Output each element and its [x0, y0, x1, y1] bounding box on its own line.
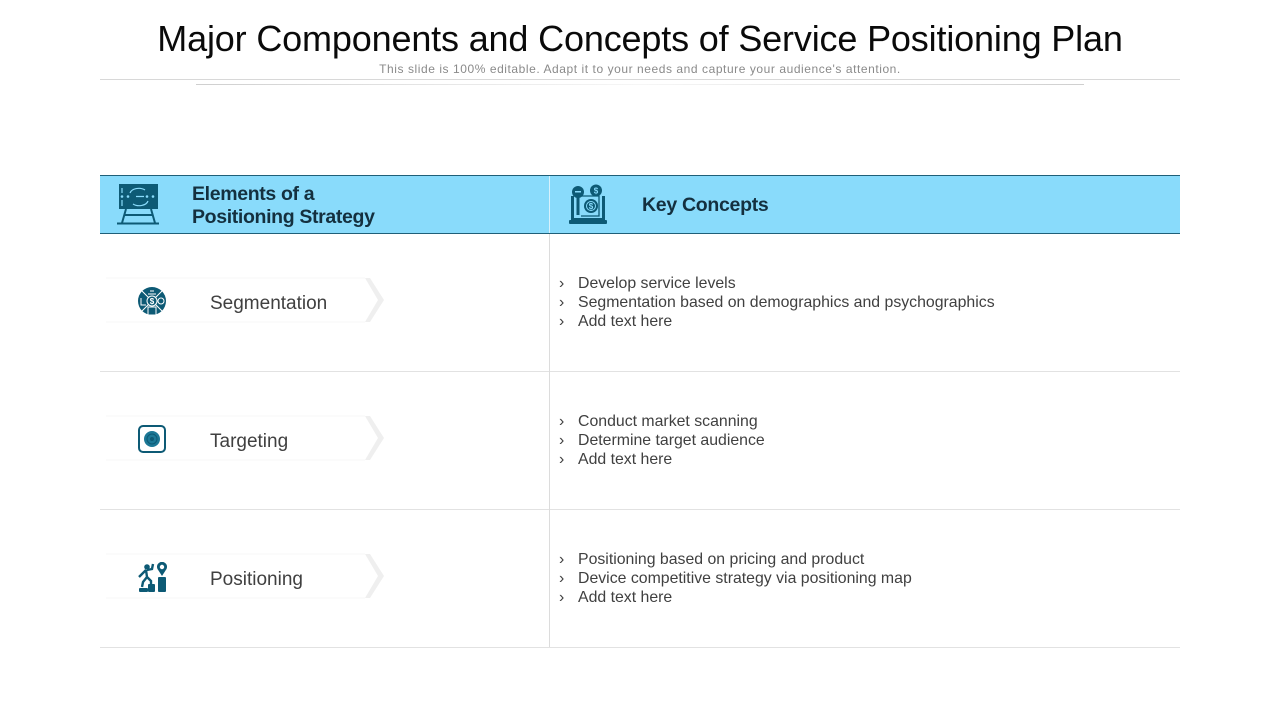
- row: segmentation concepts: ›: [559, 294, 564, 311]
- row: segmentation concepts: ›: [559, 275, 564, 292]
- chevron tag: [365, 278, 384, 322]
- row: targeting concepts: Conduct market scanning: [578, 413, 758, 430]
- row: targeting concepts: ›: [559, 413, 564, 430]
- row: targeting concepts: Add text here: [578, 451, 672, 468]
- row: targeting concepts: Determine target audience: [578, 432, 765, 449]
- row: segmentation label: [138, 278, 384, 322]
- row: targeting label: [138, 416, 384, 460]
- row: positioning concepts: Positioning based on pricing and product: [578, 551, 864, 568]
- segmentation text: Segmentation: [210, 293, 327, 314]
- row: positioning concepts: Device competitive strategy via positioning map: [578, 570, 912, 587]
- header: key concepts: Key Concepts: [642, 194, 768, 216]
- chevron tag: [365, 554, 384, 598]
- row: positioning concepts: ›: [559, 570, 564, 587]
- positioning text: Positioning: [210, 569, 303, 590]
- row: targeting concepts: ›: [559, 451, 564, 468]
- row: positioning concepts: ›: [559, 589, 564, 606]
- row: targeting concepts: ›: [559, 432, 564, 449]
- header: elements of a positioning strategy: Positioning Strategy: [192, 206, 375, 228]
- title: Major Components and Concepts of Service Positioning Plan: [157, 18, 1123, 59]
- row: segmentation concepts: Add text here: [578, 313, 672, 330]
- targeting text: Targeting: [210, 431, 288, 452]
- row: targeting concepts: [559, 413, 765, 468]
- table header band: [100, 175, 1180, 234]
- icon: person climbing to pin: [138, 562, 167, 592]
- icon: strategy board: [117, 184, 159, 224]
- icon: laptop with key and dollar: $: [594, 186, 599, 196]
- chevron tag: [365, 416, 384, 460]
- row: positioning concepts: Add text here: [578, 589, 672, 606]
- subtitle: This slide is 100% editable. Adapt it to your needs and capture your audience's attention.: [379, 62, 901, 76]
- row: segmentation concepts: [559, 275, 995, 330]
- row: positioning label: [138, 554, 384, 598]
- header: elements of a positioning strategy: Elements of a: [192, 183, 314, 205]
- icon: laptop with key and dollar: $: [589, 202, 594, 211]
- row: segmentation concepts: Develop service levels: [578, 275, 736, 292]
- icon: laptop with key and dollar: [569, 184, 607, 224]
- icon: target: [138, 425, 166, 453]
- icon: segmentation wheel: [138, 287, 166, 314]
- header: elements of a positioning strategy: [192, 183, 375, 228]
- row: positioning concepts: ›: [559, 551, 564, 568]
- row: segmentation concepts: Segmentation based on demographics and psychographics: [578, 294, 995, 311]
- row: positioning concepts: [559, 551, 912, 606]
- icon: segmentation wheel: $: [150, 297, 155, 306]
- row: segmentation concepts: ›: [559, 313, 564, 330]
